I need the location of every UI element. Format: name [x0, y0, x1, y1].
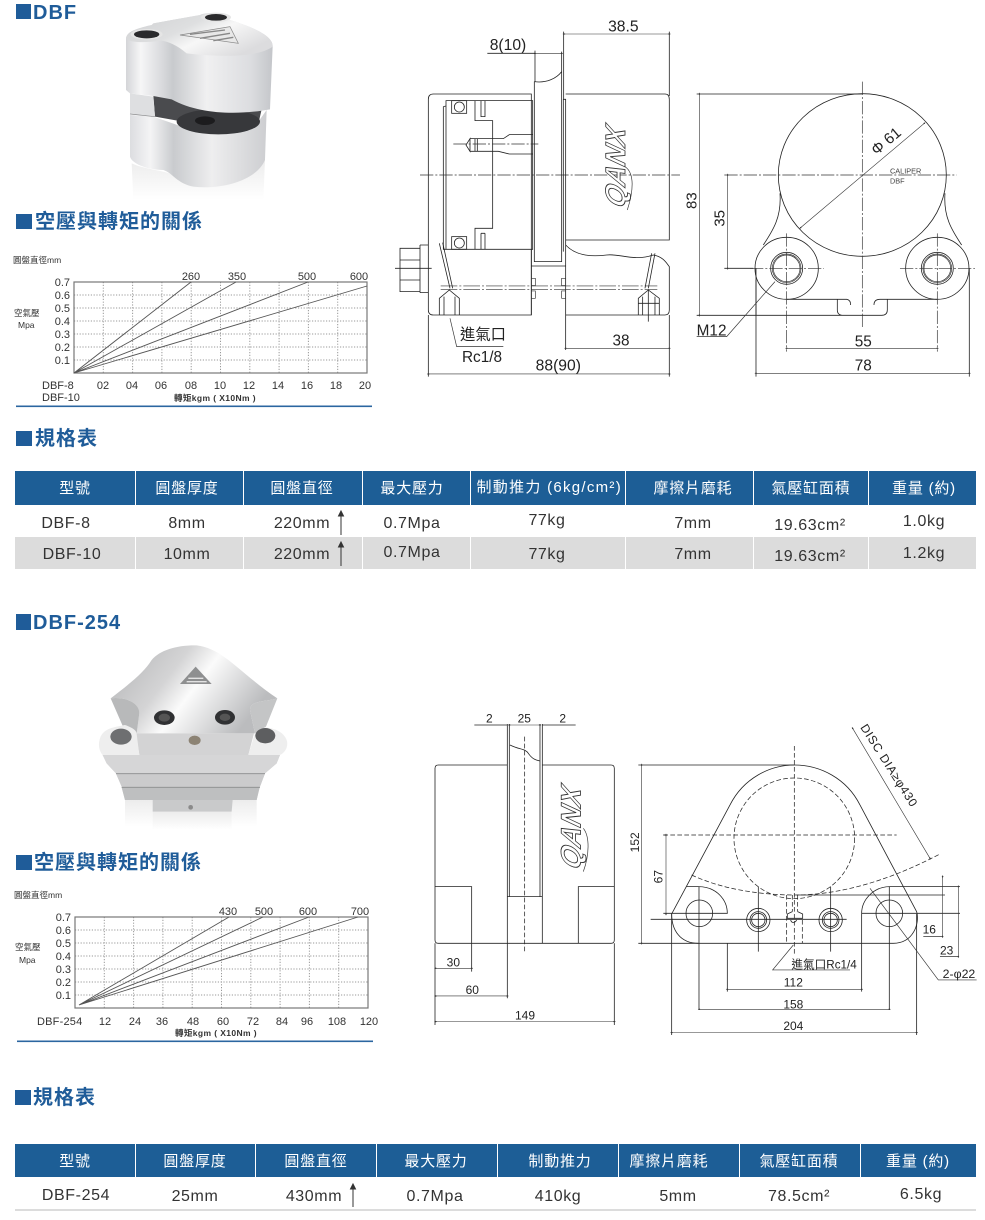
technical drawing: DBF-254 side view: 60 — [466, 983, 479, 997]
technical drawing: DBF-254 front view: 152 — [628, 832, 642, 852]
heading: air pressure and torque (DBF-254): 空壓與轉矩的關係 — [34, 850, 202, 874]
chart: pressure vs torque DBF-254: 圓盤直徑mm — [14, 890, 62, 900]
chart: pressure vs torque DBF-254: 108 — [328, 1016, 346, 1028]
chart: pressure vs torque DBF-254 — [14, 890, 378, 1042]
chart: pressure vs torque DBF: 06 — [155, 380, 167, 392]
table: DBF specifications: 圓盤厚度 — [155, 480, 219, 497]
table: DBF specifications: DBF-8 — [41, 515, 91, 532]
technical drawing: DBF-254 front view: 158 — [783, 997, 804, 1011]
table: DBF specifications: 摩擦片磨耗 — [653, 479, 733, 497]
technical drawing: DBF front view: DBF — [890, 176, 905, 185]
chart: pressure vs torque DBF: 16 — [301, 380, 313, 392]
chart: pressure vs torque DBF: 350 — [228, 271, 246, 283]
chart: pressure vs torque DBF-254: Mpa — [19, 955, 36, 965]
chart: pressure vs torque DBF-254: 430 — [219, 906, 237, 918]
table: DBF specifications: 77kg — [528, 546, 566, 563]
table: DBF specifications: 8mm — [168, 515, 206, 532]
chart: pressure vs torque DBF: 空氣壓 — [14, 308, 40, 318]
chart: pressure vs torque DBF-254: 84 — [276, 1016, 288, 1028]
technical drawing: DBF front view: M12 — [697, 323, 726, 340]
chart: pressure vs torque DBF: 12 — [243, 380, 255, 392]
technical drawing: DBF front view: 55 — [855, 333, 872, 350]
technical drawing: DBF-254 front view: DISC DIA≥φ430 — [857, 721, 920, 809]
technical drawing: DBF-254 side view: 2 — [559, 711, 566, 725]
product photo: DBF-254 caliper — [99, 645, 287, 830]
technical drawing: DBF side view: Rc1/8 — [462, 349, 502, 366]
chart: pressure vs torque DBF: 08 — [185, 380, 197, 392]
chart: pressure vs torque DBF-254: 600 — [299, 906, 317, 918]
technical drawing: DBF front view: Φ 61 — [868, 124, 905, 159]
chart: pressure vs torque DBF: 600 — [350, 271, 368, 283]
technical drawing: DBF front view: 83 — [683, 192, 700, 209]
chart: pressure vs torque DBF-254: 12 — [99, 1016, 111, 1028]
chart: pressure vs torque DBF: 04 — [126, 380, 138, 392]
chart: pressure vs torque DBF: 0.6 — [55, 290, 70, 302]
chart: pressure vs torque DBF: 02 — [97, 380, 109, 392]
table: DBF specifications: 氣壓缸面積 — [771, 479, 851, 497]
chart: pressure vs torque DBF: 0.4 — [55, 316, 70, 328]
chart: pressure vs torque DBF: 0.1 — [55, 355, 70, 367]
chart: pressure vs torque DBF — [13, 255, 372, 407]
technical drawing: DBF side view: 88(90) — [536, 358, 581, 375]
table: DBF-254 specifications: 型號 — [59, 1153, 91, 1170]
chart: pressure vs torque DBF-254: 36 — [156, 1016, 168, 1028]
chart: pressure vs torque DBF: 18 — [330, 380, 342, 392]
technical drawing: DBF-254 side view: 30 — [447, 955, 460, 969]
table: DBF specifications: 型號 — [59, 480, 91, 497]
chart: pressure vs torque DBF-254: 120 — [360, 1016, 378, 1028]
chart: pressure vs torque DBF-254: 700 — [351, 906, 369, 918]
table: DBF-254 specifications: 78.5cm² — [768, 1188, 830, 1205]
chart: pressure vs torque DBF-254: 48 — [187, 1016, 199, 1028]
table: DBF-254 specifications: 25mm — [172, 1188, 218, 1205]
technical drawing: DBF-254 side view: 2 — [486, 711, 493, 725]
table: DBF-254 specifications: 圓盤直徑 — [284, 1153, 348, 1170]
chart: pressure vs torque DBF-254: 500 — [255, 906, 273, 918]
table: DBF-254 specifications: 氣壓缸面積 — [759, 1152, 839, 1170]
chart: pressure vs torque DBF: Mpa — [18, 320, 35, 330]
table: DBF specifications: 19.63cm² — [774, 548, 846, 565]
table: DBF-254 specifications: 430mm — [286, 1188, 342, 1205]
icon: up arrow for disc diameter — [350, 1184, 356, 1207]
chart: pressure vs torque DBF-254: 轉矩kgm ( X10Nm ) — [175, 1028, 257, 1038]
technical drawing: DBF front view: 35 — [711, 210, 728, 227]
technical drawing: DBF-254 front view: 2-φ22 — [943, 967, 975, 981]
table: DBF-254 specifications — [15, 1144, 976, 1211]
table: DBF specifications: 制動推力 (6kg/cm²) — [476, 479, 622, 496]
chart: pressure vs torque DBF-254: 0.6 — [56, 925, 71, 937]
table: DBF specifications: 7mm — [674, 515, 712, 532]
table: DBF-254 specifications: 410kg — [535, 1188, 581, 1205]
technical drawing: DBF side view: 38.5 — [608, 19, 639, 36]
chart: pressure vs torque DBF: 0.2 — [55, 342, 70, 354]
chart: pressure vs torque DBF: 0.7 — [55, 277, 70, 289]
chart: pressure vs torque DBF: 0.5 — [55, 303, 70, 315]
table: DBF-254 specifications: 重量 (約) — [886, 1153, 950, 1170]
technical drawing: DBF front view — [683, 82, 975, 377]
chart: pressure vs torque DBF: 260 — [182, 271, 200, 283]
table: DBF specifications — [15, 471, 976, 569]
technical drawing: DBF-254 front view — [628, 721, 977, 1035]
chart: pressure vs torque DBF-254: 60 — [217, 1016, 229, 1028]
table: DBF specifications: 220mm — [274, 546, 330, 563]
technical drawing: DBF-254 front view: 204 — [783, 1019, 804, 1033]
chart: pressure vs torque DBF-254: DBF-254 — [37, 1016, 82, 1028]
technical drawing: DBF side view: 8(10) — [490, 37, 526, 54]
technical drawing: DBF-254 side view: 149 — [515, 1009, 535, 1023]
chart: pressure vs torque DBF-254: 0.2 — [56, 977, 71, 989]
chart: pressure vs torque DBF: 10 — [214, 380, 226, 392]
product photo: DBF caliper — [126, 13, 273, 200]
table: DBF specifications: DBF-10 — [43, 546, 101, 563]
table: DBF specifications: 最大壓力 — [380, 480, 444, 497]
table: DBF specifications: 19.63cm² — [774, 517, 846, 534]
chart: pressure vs torque DBF-254: 24 — [129, 1016, 141, 1028]
table: DBF specifications: 圓盤直徑 — [270, 480, 334, 497]
table: DBF specifications: 7mm — [674, 546, 712, 563]
technical drawing: DBF front view: CALIPER — [890, 167, 921, 176]
section heading: specification table (DBF): 規格表 — [35, 427, 98, 450]
table: DBF-254 specifications: 0.7Mpa — [407, 1188, 463, 1205]
technical drawing: DBF front view: 78 — [855, 358, 872, 375]
chart: pressure vs torque DBF: DBF-8 — [42, 380, 74, 392]
table: DBF specifications: 1.2kg — [903, 545, 945, 562]
table: DBF specifications: 0.7Mpa — [384, 515, 440, 532]
icon: up arrows for disc diameter — [338, 511, 344, 566]
technical drawing: DBF-254 front view: 進氣口Rc1/4 — [791, 957, 857, 971]
table: DBF-254 specifications: 圓盤厚度 — [163, 1153, 227, 1170]
table: DBF-254 specifications: 摩擦片磨耗 — [629, 1152, 709, 1170]
chart: pressure vs torque DBF: 轉矩kgm ( X10Nm ) — [174, 393, 256, 403]
technical drawing: DBF-254 front view: 112 — [784, 976, 803, 990]
chart: pressure vs torque DBF: 14 — [272, 380, 284, 392]
chart: pressure vs torque DBF-254: 0.7 — [56, 912, 71, 924]
heading: air pressure and torque (DBF): 空壓與轉矩的關係 — [35, 209, 203, 233]
technical drawing: DBF-254 side view: 25 — [518, 711, 531, 725]
table: DBF specifications: 1.0kg — [903, 513, 945, 530]
chart: pressure vs torque DBF-254: 0.4 — [56, 951, 71, 963]
section heading: DBF: DBF — [33, 2, 77, 24]
table: DBF specifications: 0.7Mpa — [384, 544, 440, 561]
table: DBF-254 specifications: DBF-254 — [42, 1187, 110, 1204]
technical drawing: DBF-254 front view: 67 — [652, 870, 666, 883]
technical drawing: DBF side view: QANX — [600, 119, 632, 213]
technical drawing: DBF side view: 進氣口 — [460, 326, 506, 343]
section heading: specification table (DBF-254): 規格表 — [33, 1086, 96, 1109]
table: DBF-254 specifications: 6.5kg — [900, 1186, 942, 1203]
table: DBF specifications: 10mm — [164, 546, 210, 563]
table: DBF-254 specifications: 5mm — [659, 1188, 697, 1205]
technical drawing: DBF-254 front view: 23 — [940, 943, 954, 957]
chart: pressure vs torque DBF-254: 空氣壓 — [15, 942, 41, 952]
chart: pressure vs torque DBF-254: 0.3 — [56, 964, 71, 976]
chart: pressure vs torque DBF: 0.3 — [55, 329, 70, 341]
chart: pressure vs torque DBF: 圓盤直徑mm — [13, 255, 61, 265]
table: DBF specifications: 220mm — [274, 515, 330, 532]
chart: pressure vs torque DBF: 20 — [359, 380, 371, 392]
table: DBF specifications: 77kg — [528, 512, 566, 529]
chart: pressure vs torque DBF: 500 — [298, 271, 316, 283]
technical drawing: DBF-254 side view: QANX — [556, 779, 587, 875]
table: DBF-254 specifications: 最大壓力 — [404, 1153, 468, 1170]
chart: pressure vs torque DBF: DBF-10 — [42, 392, 80, 404]
chart: pressure vs torque DBF-254: 0.5 — [56, 938, 71, 950]
chart: pressure vs torque DBF-254: 0.1 — [56, 990, 71, 1002]
section heading: DBF-254: DBF-254 — [33, 612, 121, 634]
technical drawing: DBF-254 side view — [435, 711, 614, 1025]
technical drawing: DBF-254 front view: 16 — [923, 923, 936, 937]
table: DBF specifications: 重量 (約) — [892, 480, 956, 497]
technical drawing: DBF side view — [395, 19, 680, 377]
chart: pressure vs torque DBF-254: 72 — [247, 1016, 259, 1028]
technical drawing: DBF side view: 38 — [612, 333, 630, 350]
chart: pressure vs torque DBF-254: 96 — [301, 1016, 313, 1028]
table: DBF-254 specifications: 制動推力 — [528, 1153, 592, 1170]
